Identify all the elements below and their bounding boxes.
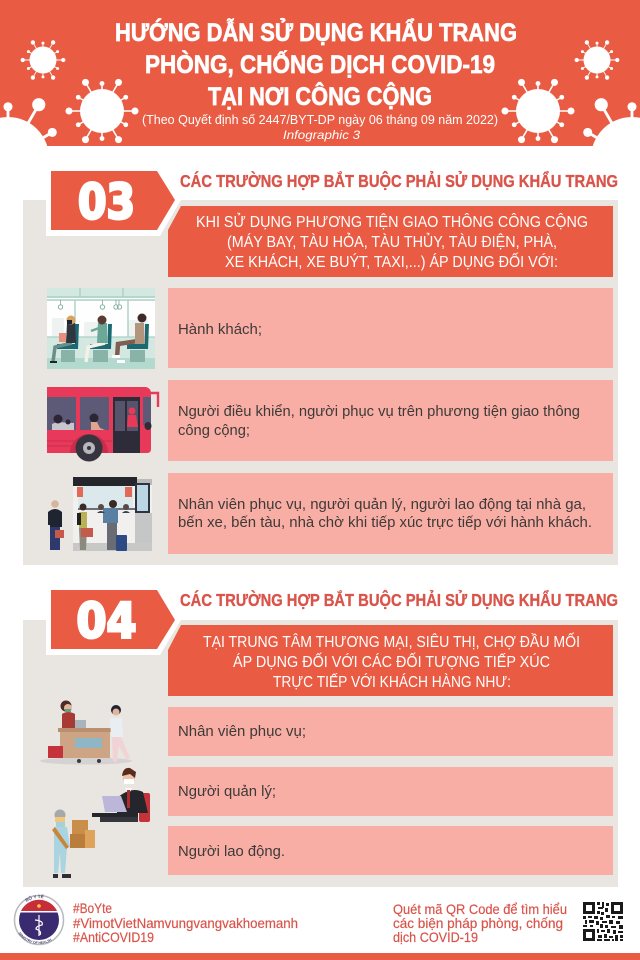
row: workers: Người lao động. xyxy=(178,844,285,860)
title: PHÒNG, CHỐNG DỊCH COVID-19 xyxy=(145,49,495,79)
red box 03 xyxy=(168,206,613,277)
logo: ministry of health xyxy=(14,894,64,946)
logo staff xyxy=(35,915,42,936)
QR call to action: các biện pháp phòng, chống xyxy=(393,915,563,931)
station people xyxy=(48,509,62,527)
illustration: shop counter xyxy=(40,700,132,764)
title: HƯỚNG DẪN SỬ DỤNG KHẨU TRANG xyxy=(115,17,517,47)
red box 03: (MÁY BAY, TÀU HỎA, TÀU THỦY, TÀU ĐIỆN, PHÀ, xyxy=(227,232,557,251)
infographic number: Infographic 3 xyxy=(283,128,360,142)
red box 04: ÁP DỤNG ĐỐI VỚI CÁC ĐỐI TƯỢNG TIẾP XÚC xyxy=(233,651,550,671)
logo: ministry of health: MINISTRY OF HEALTH xyxy=(18,932,52,944)
illustration: red bus xyxy=(47,387,158,462)
panel: section 03 xyxy=(23,165,618,565)
seats xyxy=(57,324,149,349)
QR call to action xyxy=(393,901,567,945)
row: drivers: Người điều khiển, người phục vụ trên phương tiện giao thông xyxy=(178,404,580,420)
badge: 03 xyxy=(46,165,181,236)
red box 04 xyxy=(168,625,613,696)
virus decorations xyxy=(0,40,640,146)
QR call to action: Quét mã QR Code để tìm hiểu xyxy=(393,901,567,917)
header banner xyxy=(0,0,640,146)
hashtags: #VimotVietNamvungvangvakhoemanh xyxy=(73,915,298,931)
hashtags: #AntiCOVID19 xyxy=(73,929,154,945)
badge: 04 xyxy=(46,584,181,655)
QR code xyxy=(583,902,623,941)
hashtags: #BoYte xyxy=(73,900,112,916)
subtitle: (Theo Quyết định số 2447/BYT-DP ngày 06 tháng 09 năm 2022) xyxy=(142,113,498,127)
footer xyxy=(0,894,640,960)
logo: ministry of health: BỘ Y TẾ xyxy=(25,894,44,902)
row: service staff xyxy=(168,707,613,756)
badge: 04: 04 xyxy=(76,594,136,650)
red box 04: TRỰC TIẾP VỚI KHÁCH HÀNG NHƯ: xyxy=(273,672,511,691)
row: station staff: Nhân viên phục vụ, người quản lý, người lao động tại nhà ga, xyxy=(178,497,586,513)
row: station staff xyxy=(168,473,613,554)
row: passengers: Hành khách; xyxy=(178,322,262,338)
illustration: station kiosk xyxy=(48,477,152,551)
row: station staff: bến xe, bến tàu, nhà chờ khi tiếp xúc trực tiếp với hành khách. xyxy=(178,515,592,531)
title: TẠI NƠI CÔNG CỘNG xyxy=(208,81,432,111)
illustration: manager at laptop xyxy=(92,768,150,822)
row: managers: Người quản lý; xyxy=(178,784,276,800)
bottom bar xyxy=(0,953,640,960)
row: passengers xyxy=(168,288,613,368)
badge: 03: 03 xyxy=(78,174,135,230)
QR call to action: dịch COVID-19 xyxy=(393,929,478,945)
row: service staff: Nhân viên phục vụ; xyxy=(178,724,306,740)
red box 04: TẠI TRUNG TÂM THƯƠNG MẠI, SIÊU THỊ, CHỢ ĐẦU MỐI xyxy=(203,631,580,651)
passengers xyxy=(53,343,72,362)
row: managers xyxy=(168,767,613,816)
title xyxy=(115,17,517,111)
red box 03: XE KHÁCH, XE BUÝT, TAXI,...) ÁP DỤNG ĐỐI VỚI: xyxy=(225,251,558,271)
illustration: delivery worker xyxy=(52,810,95,878)
hashtags xyxy=(73,900,298,945)
row: drivers: công cộng; xyxy=(178,423,250,439)
panel: section 04 xyxy=(23,584,618,887)
row: drivers xyxy=(168,380,613,461)
red box 03: KHI SỬ DỤNG PHƯƠNG TIỆN GIAO THÔNG CÔNG CỘNG xyxy=(196,212,588,231)
illustration: bus interior xyxy=(47,288,155,369)
row: workers xyxy=(168,826,613,875)
